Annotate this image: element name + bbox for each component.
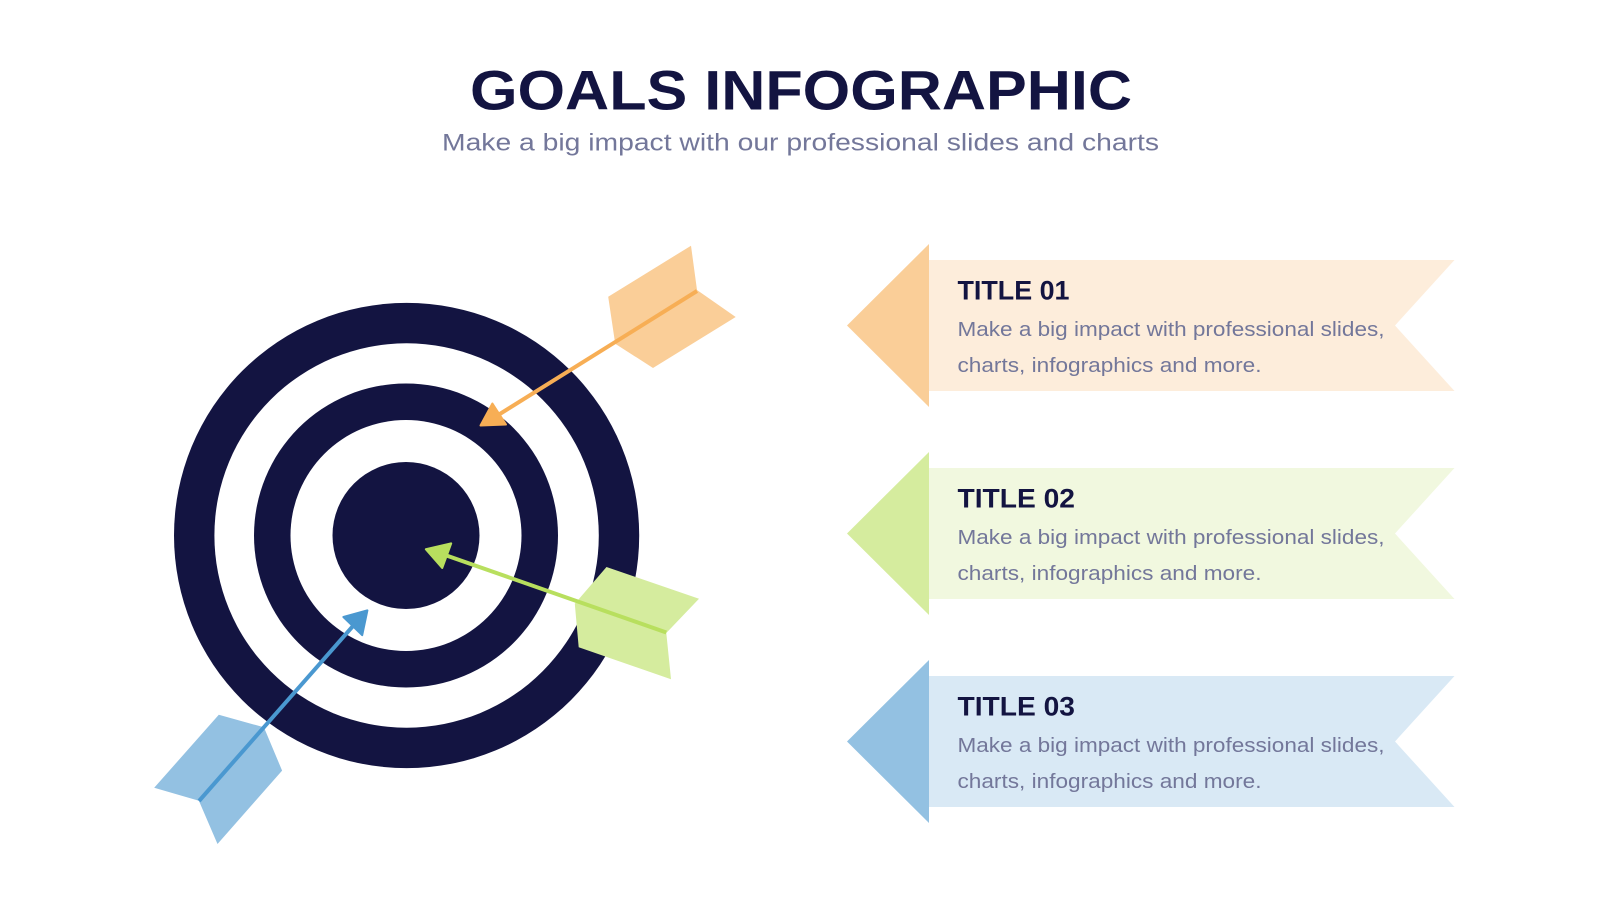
panel: title 01 [847, 244, 1454, 407]
heading: TITLE 03 [958, 692, 1075, 722]
target with arrows [154, 246, 736, 844]
description: charts, infographics and more. [958, 355, 1262, 377]
description: Make a big impact with professional slides, [958, 735, 1384, 757]
arrow: orange [480, 246, 736, 426]
panel: title 03 [847, 660, 1454, 823]
arrow: blue [154, 610, 367, 844]
ribbon arrowhead [847, 244, 929, 407]
description: Make a big impact with professional slides, [958, 319, 1384, 341]
ribbon band [929, 468, 1454, 599]
panel: title 02 [847, 452, 1454, 615]
header [442, 58, 1159, 156]
description: charts, infographics and more. [958, 563, 1262, 585]
heading: TITLE 02 [958, 484, 1075, 514]
arrow: green [426, 543, 699, 679]
ribbon arrowhead [847, 660, 929, 823]
subtitle: Make a big impact with our professional slides and charts [442, 130, 1159, 156]
description: Make a big impact with professional slides, [958, 527, 1384, 549]
heading: TITLE 01 [958, 276, 1070, 306]
title: GOALS INFOGRAPHIC [470, 58, 1132, 122]
ribbon band [929, 676, 1454, 807]
ribbon band [929, 260, 1454, 391]
description: charts, infographics and more. [958, 771, 1262, 793]
target rings [174, 303, 639, 768]
ribbon arrowhead [847, 452, 929, 615]
